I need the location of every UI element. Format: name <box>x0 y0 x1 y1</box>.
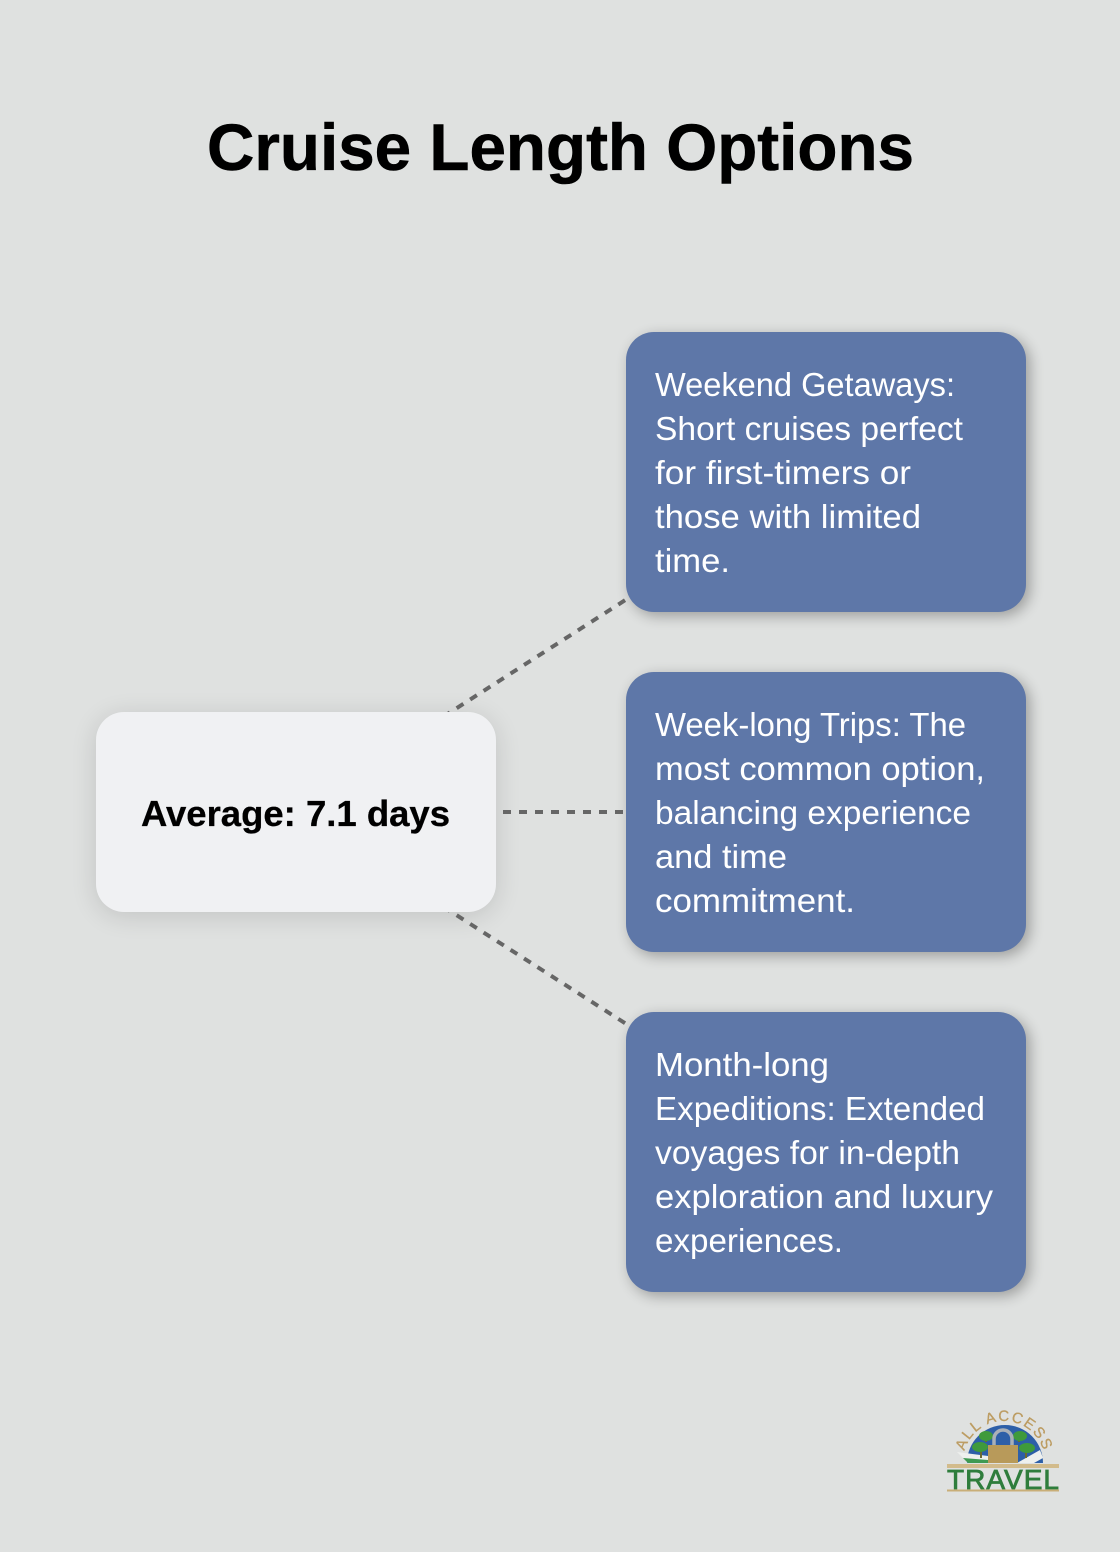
panel: month-long expeditions: experiences. <box>655 1222 843 1259</box>
panel: weekend getaways: for first-timers or <box>655 454 911 491</box>
panel: weekend getaways: time. <box>655 542 730 579</box>
panel: month-long expeditions: Month-long <box>655 1046 829 1083</box>
panel: weekend getaways: those with limited <box>655 498 921 535</box>
icon: All Access Travel logo: TRAVEL <box>947 1464 1059 1495</box>
panel: month-long expeditions: exploration and luxury <box>655 1178 994 1215</box>
panel: week-long trips: balancing experience <box>655 794 971 831</box>
panel: month-long expeditions <box>626 1012 1026 1292</box>
panel: week-long trips: commitment. <box>655 882 855 919</box>
panel: week-long trips: and time <box>655 838 787 875</box>
panel: weekend getaways <box>626 332 1026 612</box>
title: Cruise Length Options <box>207 110 914 184</box>
panel shadows <box>96 336 1030 1296</box>
panel: average <box>96 712 496 912</box>
icon: All Access Travel logo: ALL ACCESS <box>956 1410 1052 1452</box>
panel: average: Average: 7.1 days <box>141 793 450 834</box>
panel: week-long trips: Week-long Trips: The <box>655 706 966 743</box>
panel: week-long trips: most common option, <box>655 750 985 787</box>
panel: weekend getaways: Short cruises perfect <box>655 410 963 447</box>
dashed connectors <box>443 584 650 1039</box>
panel: month-long expeditions: voyages for in-depth <box>655 1134 960 1171</box>
panel: week-long trips <box>626 672 1026 952</box>
panel: weekend getaways: Weekend Getaways: <box>655 366 955 403</box>
panel: month-long expeditions: Expeditions: Extended <box>655 1090 985 1127</box>
icon: All Access Travel logo <box>947 1410 1059 1495</box>
